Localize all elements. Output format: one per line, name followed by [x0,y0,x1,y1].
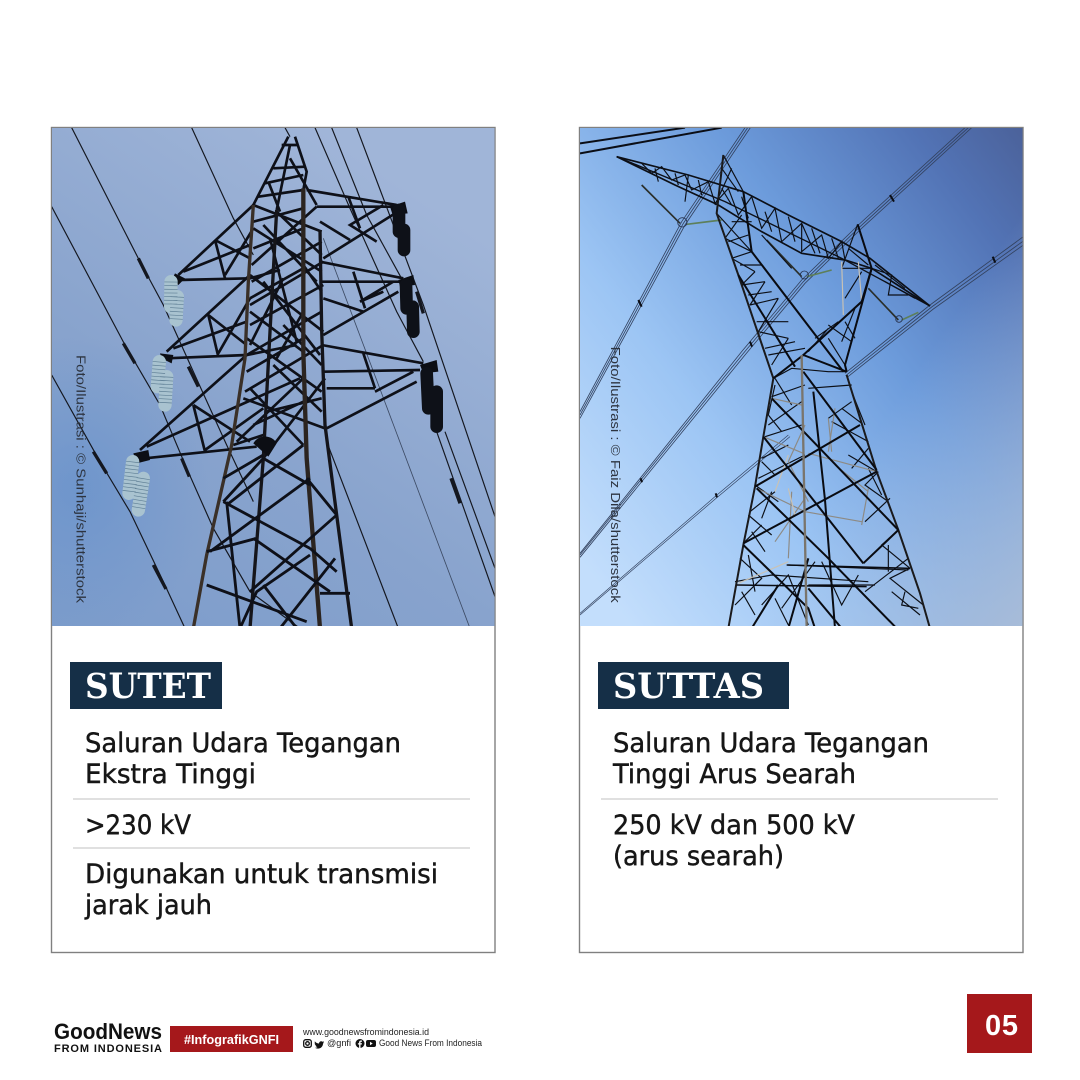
footer logo: GoodNews from Indonesia: GoodNews [54,1019,162,1044]
panel: SUTET card [50,125,497,952]
label: SUTTAS: SUTTAS [613,667,764,707]
insulators [129,210,437,510]
footer social links: Good News From Indonesia [379,1038,482,1048]
icon: youtube [366,1040,376,1047]
text: SUTET usage: Digunakan untuk transmisi [85,859,438,890]
icon: facebook [356,1039,364,1048]
text: SUTTAS voltage: (arus searah) [613,841,784,872]
insulators [642,185,918,322]
footer social links [302,1027,482,1049]
body bracing [237,205,325,458]
tower peak [253,137,317,212]
tower legs [193,205,253,628]
photo credit: Foto/Ilustrasi : © Sunhaji/shutterstock [74,355,89,604]
text: SUTTAS name: Saluran Udara Tegangan [613,728,929,759]
text: SUTET name: Saluran Udara Tegangan [85,728,401,759]
footer logo: GoodNews from Indonesia: FROM INDONESIA [54,1043,162,1055]
text: SUTTAS voltage [613,810,855,872]
page number [967,994,1032,1053]
label: SUTET: SUTET [85,667,211,707]
text: SUTTAS voltage: 250 kV dan 500 kV [613,810,855,841]
photo: SUTET transmission tower [52,128,494,626]
arms [307,190,397,258]
hashtag badge [170,1026,293,1052]
footer logo: GoodNews from Indonesia [54,1019,162,1055]
photo credit: Foto/Ilustrasi : © Faiz Dila/shutterstock [608,347,623,603]
tower body [617,155,930,625]
text: SUTET name: Ekstra Tinggi [85,759,256,790]
label: SUTTAS [598,662,789,709]
page number: 05 [985,1010,1018,1042]
footer social links: @gnfi [327,1038,351,1048]
text: SUTET usage: jarak jauh [84,890,212,921]
text: SUTET usage [84,859,438,921]
photo: SUTTAS transmission tower [580,128,1022,626]
hashtag badge: #InfografikGNFI [184,1032,279,1047]
text: SUTET voltage: >230 kV [85,810,191,841]
icon: twitter [315,1041,324,1049]
icon: instagram [304,1040,311,1047]
panel: SUTTAS card [575,125,1025,952]
text: SUTET name [85,728,401,790]
text: SUTTAS name [612,728,929,790]
footer social links: www.goodnewsfromindonesia.id [302,1027,429,1037]
text: SUTTAS name: Tinggi Arus Searah [612,759,856,790]
